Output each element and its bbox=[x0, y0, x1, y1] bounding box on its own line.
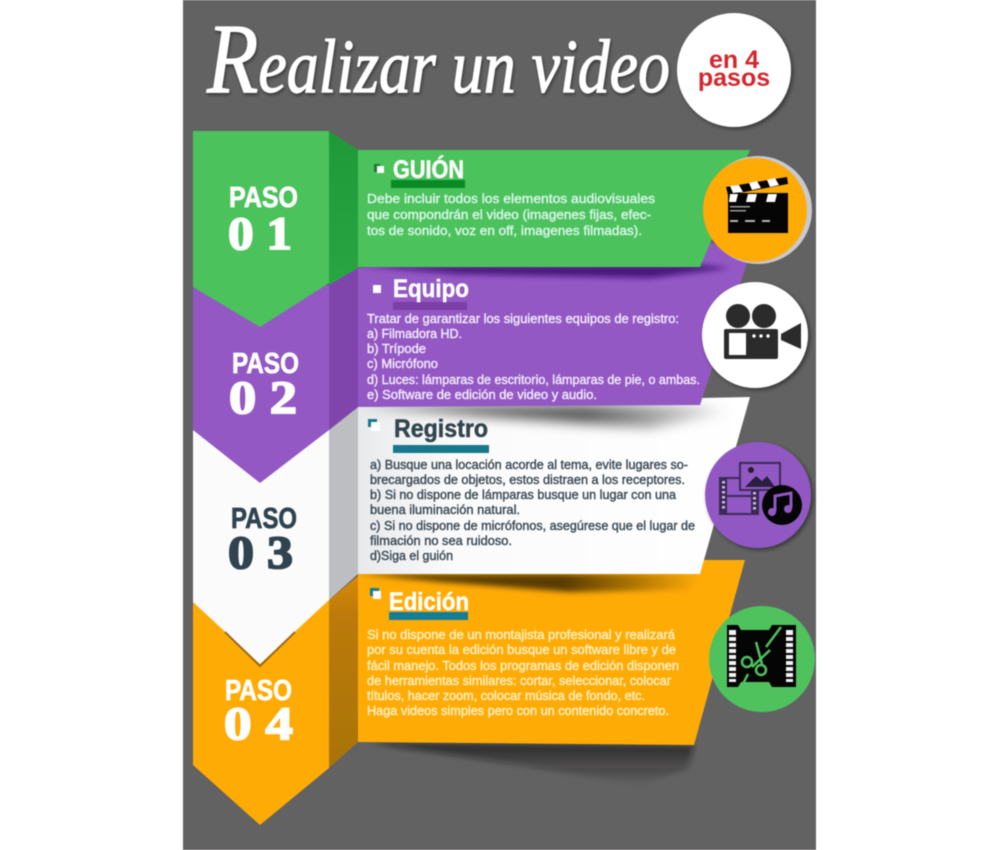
step 1: Guión bbox=[193, 131, 812, 327]
text block: Registro: b) Si no dispone de lámparas busque un lugar con una bbox=[370, 488, 676, 502]
text block: Equipo: a) Filmadora HD. bbox=[367, 327, 462, 341]
text block: Guión: tos de sonido, voz en off, imagenes filmadas). bbox=[367, 224, 642, 238]
shadow under panel 3 bbox=[358, 574, 700, 592]
text block: Registro bbox=[370, 458, 695, 563]
panel 2 ribbon bbox=[358, 243, 748, 407]
text block: Equipo: e) Software de edición de video y audio. bbox=[367, 388, 597, 402]
icon: clapperboard bbox=[703, 156, 812, 264]
label: PASO 04: 0 4 bbox=[224, 698, 293, 750]
arrow column 3 bbox=[193, 430, 329, 664]
heading: Registro: Registro bbox=[394, 415, 488, 443]
text block: Registro: brecargados de objetos, estos distraen a los receptores. bbox=[370, 473, 685, 487]
fold 4 bbox=[329, 576, 358, 768]
text block: Edición bbox=[367, 628, 679, 718]
text block: Equipo: c) Micrófono bbox=[367, 357, 438, 371]
text block: Edición: de herramientas similares: cortar, seleccionar, colocar bbox=[367, 674, 671, 688]
arrow column 4 bbox=[193, 600, 329, 825]
text block: Guión: que compondrán el video (imagenes fijas, efec- bbox=[367, 208, 651, 222]
panel 4 ribbon bbox=[358, 560, 745, 745]
fold 1 bbox=[329, 131, 358, 285]
text block: Guión: Debe incluir todos los elementos audiovisuales bbox=[367, 192, 655, 206]
icon: film, photo and music bbox=[705, 442, 811, 548]
text block: Edición: por su cuenta la edición busque un software libre y de bbox=[367, 643, 676, 657]
tip shadow 3 bbox=[225, 632, 295, 666]
text block: Guión bbox=[367, 192, 655, 238]
badge: en 4 pasos: pasos bbox=[698, 64, 770, 92]
text block: Registro: a) Busque una locación acorde al tema, evite lugares so- bbox=[370, 458, 688, 472]
text block: Registro: c) Si no dispone de micrófonos, asegúrese que el lugar de bbox=[370, 519, 695, 533]
label: PASO 03 bbox=[228, 503, 297, 579]
label: PASO 04: PASO bbox=[225, 675, 292, 707]
fold 2 bbox=[329, 266, 358, 430]
step 2: Equipo bbox=[193, 243, 808, 483]
heading: Edición bbox=[370, 588, 469, 620]
label: PASO 04 bbox=[224, 675, 293, 750]
panel 1 ribbon bbox=[358, 150, 750, 267]
label: PASO 02 bbox=[229, 348, 299, 424]
heading: Registro bbox=[368, 415, 489, 453]
label: PASO 01 bbox=[228, 182, 298, 260]
text block: Edición: fácil manejo. Todos los programas de edición disponen bbox=[367, 659, 679, 673]
text block: Edición: títulos, hacer zoom, colocar música de fondo, etc. bbox=[367, 689, 645, 703]
icon: video camera bbox=[702, 282, 808, 388]
label: PASO 02: 0 2 bbox=[229, 372, 297, 424]
arrow column 2 bbox=[193, 285, 329, 483]
shadow under panel 1 bbox=[358, 265, 730, 278]
label: PASO 01: PASO bbox=[229, 182, 298, 214]
label: PASO 01: 0 1 bbox=[228, 208, 292, 260]
shadow under panel 2 bbox=[358, 405, 735, 428]
badge: en 4 pasos bbox=[677, 13, 791, 127]
icon: film and scissors bbox=[709, 606, 815, 712]
text block: Registro: buena iluminación natural. bbox=[370, 503, 520, 517]
label: PASO 03: 0 3 bbox=[228, 527, 293, 579]
step 4: Edición bbox=[193, 560, 815, 825]
heading: Equipo: Equipo bbox=[393, 275, 469, 303]
title: Realizar un video bbox=[206, 3, 670, 114]
text block: Registro: filmación no sea ruidoso. bbox=[370, 534, 512, 548]
text block: Equipo: b) Trípode bbox=[367, 342, 426, 356]
shadow under panel 4 bbox=[370, 743, 694, 785]
text block: Equipo: d) Luces: lámparas de escritorio, lámparas de pie, o ambas. bbox=[367, 373, 700, 387]
heading: Equipo bbox=[373, 275, 469, 310]
fold 3 bbox=[329, 407, 358, 600]
page background bbox=[183, 0, 816, 850]
heading: GUIÓN bbox=[374, 154, 465, 188]
heading: GUIÓN: GUIÓN bbox=[393, 154, 464, 184]
text block: Edición: Haga videos simples pero con un contenido concreto. bbox=[367, 704, 669, 718]
label: PASO 03: PASO bbox=[231, 503, 297, 535]
text block: Equipo bbox=[367, 312, 700, 402]
heading: Edición: Edición bbox=[389, 588, 469, 616]
text block: Equipo: Tratar de garantizar los siguientes equipos de registro: bbox=[367, 312, 679, 326]
text block: Registro: d)Siga el guión bbox=[370, 549, 453, 563]
label: PASO 02: PASO bbox=[232, 348, 299, 380]
panel 3 ribbon bbox=[358, 397, 750, 574]
text block: Edición: Si no dispone de un montajista profesional y realizará bbox=[367, 628, 675, 642]
badge: en 4 pasos: en 4 bbox=[709, 46, 759, 74]
step 3: Registro bbox=[193, 397, 811, 666]
arrow column 1 bbox=[193, 131, 329, 327]
